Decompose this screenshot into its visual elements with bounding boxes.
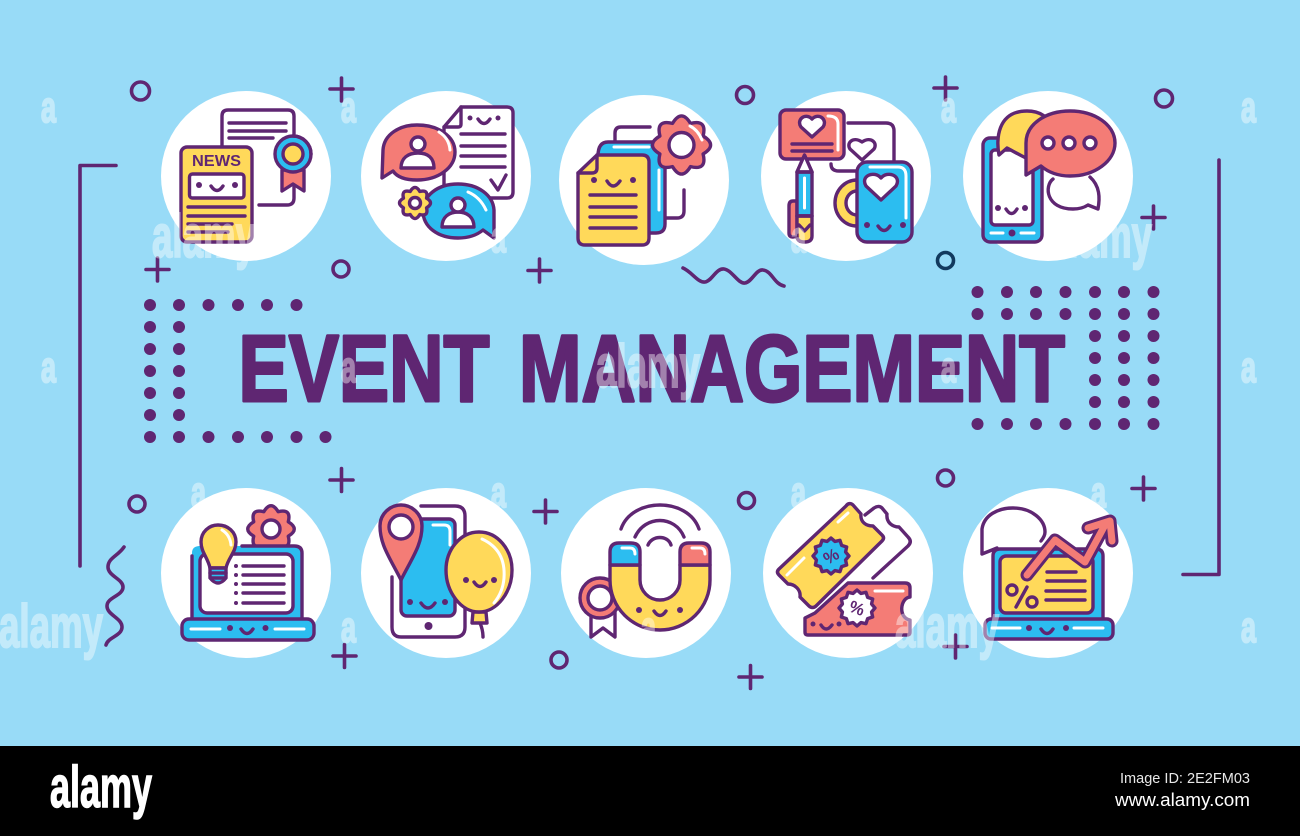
- alamy watermarks: a: [1241, 83, 1256, 132]
- icon: signal waves: [621, 505, 699, 545]
- icon: pencil: [789, 155, 812, 242]
- icon: yellow document with face: [578, 155, 649, 245]
- icon: coral chat bubble with person: [382, 125, 455, 180]
- website: www.alamy.com: [1114, 790, 1250, 810]
- left bracket: [80, 166, 116, 566]
- alamy watermarks: alamy: [1048, 203, 1152, 270]
- panel: discount tickets icon: [763, 488, 933, 658]
- icon: outline speech bubble: [982, 508, 1045, 554]
- alamy watermarks: a: [941, 343, 956, 392]
- alamy watermarks: [0, 83, 1256, 660]
- alamy watermarks: alamy: [895, 593, 999, 660]
- icon: phone outline: [392, 506, 465, 637]
- title: MANAGEMENT: [519, 316, 1065, 422]
- decorative rings: [129, 82, 1172, 668]
- dotted frame left: [144, 299, 332, 443]
- dotted frame right: [972, 286, 1160, 430]
- panel: chart laptop icon: [963, 488, 1133, 658]
- alamy watermarks: a: [1241, 603, 1256, 652]
- wavy line top: [683, 268, 784, 286]
- right bracket: [1183, 160, 1219, 574]
- icon: light bulb: [201, 525, 236, 583]
- panel: documents and settings icon: [559, 95, 729, 265]
- icon: newspaper: NEWS: [192, 153, 241, 170]
- icon: gear: [248, 506, 294, 552]
- icon: balloon with face: [446, 532, 512, 637]
- icon: coral ticket: %: [846, 597, 867, 620]
- alamy watermarks: a: [1241, 343, 1256, 392]
- title: [238, 316, 1065, 422]
- alamy watermarks: a: [41, 83, 56, 132]
- alamy watermarks: a: [191, 468, 206, 517]
- icon: award badge: [580, 578, 620, 637]
- panel: news and certificate icon: [161, 91, 331, 261]
- icon: map pin: [380, 505, 422, 580]
- icon: coral message card: [780, 110, 844, 159]
- alamy watermarks: alamy: [152, 203, 256, 270]
- icon: smartphone: [983, 138, 1042, 242]
- alamy watermarks: a: [791, 468, 806, 517]
- alamy watermarks: a: [41, 343, 56, 392]
- panel: location phone and balloon icon: [361, 488, 531, 658]
- decorative plus signs: [146, 77, 1165, 688]
- icon: small gear: [399, 187, 431, 219]
- alamy watermarks: a: [791, 213, 806, 262]
- icon: coral ticket: [805, 583, 910, 635]
- alamy logo: alamy: [50, 755, 152, 820]
- panel: love message and mug icon: [761, 91, 931, 261]
- icon: outline speech bubble: [1048, 177, 1099, 209]
- icon: laptop with percent screen: [985, 549, 1113, 639]
- panel: idea laptop icon: [161, 488, 331, 658]
- panel: contacts and document icon: [361, 91, 531, 261]
- icon: rising arrow: [1027, 521, 1112, 575]
- icon: mug with heart: [835, 162, 912, 242]
- icon: back document outline: [615, 127, 684, 218]
- alamy watermarks: a: [341, 83, 356, 132]
- panel: magnet and badge icon: [561, 488, 731, 658]
- alamy watermarks: a: [1091, 468, 1106, 517]
- image id: Image ID: 2E2FM03: [1120, 770, 1250, 787]
- alamy watermarks: a: [941, 83, 956, 132]
- alamy watermarks: a: [491, 468, 506, 517]
- icon: back ticket outline: [865, 506, 910, 578]
- icon: award ribbon: [275, 136, 311, 191]
- panel: phone and chat bubbles icon: [963, 91, 1133, 261]
- icon: back note with heart: [831, 123, 894, 171]
- footer bar: [0, 746, 1300, 836]
- icon: blue chat bubble with person: [423, 184, 494, 238]
- icon: yellow ticket: [778, 504, 884, 608]
- icon: blue phone screen: [401, 519, 455, 630]
- icon: settings gear: [652, 116, 711, 174]
- alamy watermarks: alamy: [596, 333, 700, 400]
- alamy watermarks: a: [491, 213, 506, 262]
- icon: yellow ticket: %: [820, 544, 843, 568]
- title: EVENT: [238, 316, 490, 422]
- icon: checklist document: [444, 107, 513, 198]
- wavy line left: [106, 547, 124, 645]
- alamy watermarks: alamy: [0, 593, 103, 660]
- icon: laptop with checklist: [182, 546, 314, 640]
- alamy watermarks: a: [341, 603, 356, 652]
- alamy watermarks: a: [341, 343, 356, 392]
- icon: coral speech bubble: [1026, 111, 1115, 176]
- icon: blue folder: [598, 142, 665, 233]
- icon: newspaper: [181, 147, 252, 242]
- icon: horseshoe magnet: [610, 543, 710, 630]
- icon: yellow speech bubble: [998, 111, 1050, 160]
- alamy watermarks: a: [641, 603, 656, 652]
